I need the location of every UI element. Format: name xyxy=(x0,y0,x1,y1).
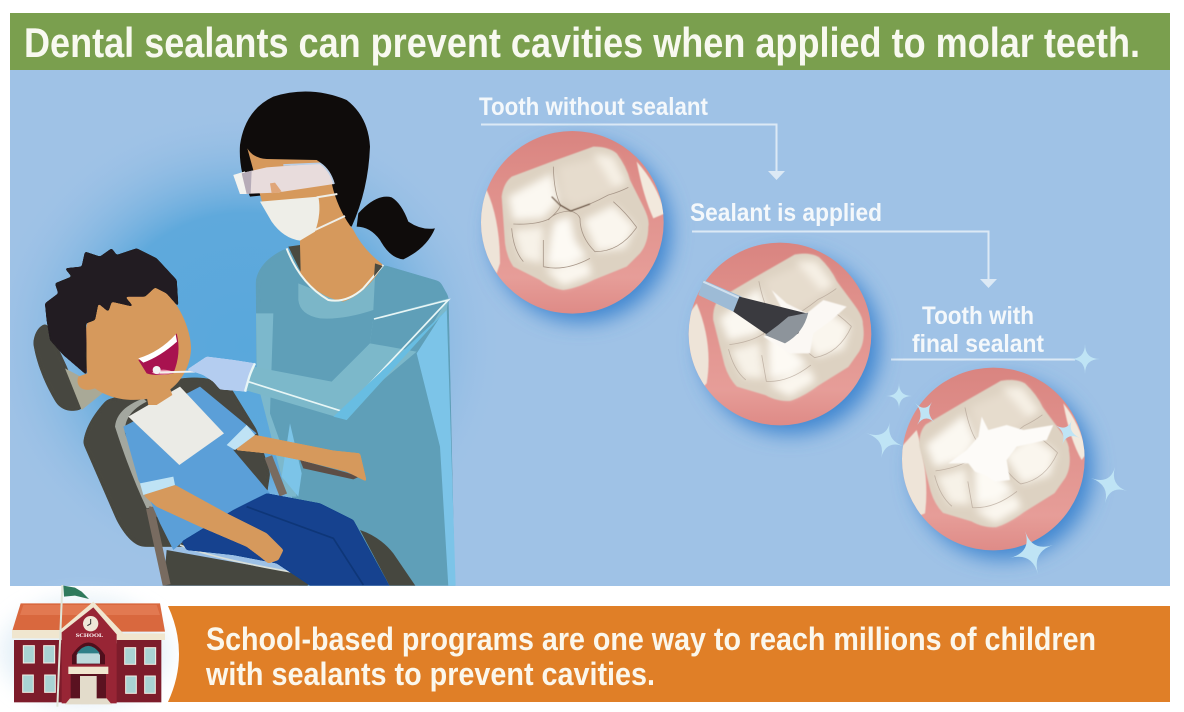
instruction: sealant applied: Sealant is applied xyxy=(690,199,882,227)
gloved hand xyxy=(187,357,255,392)
child head xyxy=(77,285,191,405)
instruction: tooth with final sealant: Tooth with xyxy=(922,302,1034,330)
instruction: tooth without sealant: Tooth without sealant xyxy=(479,93,709,121)
arrow: to sealant applied xyxy=(481,124,785,180)
panel: blue illustration background xyxy=(10,70,1170,586)
goggles xyxy=(233,163,334,194)
icon: school building: SCHOOL xyxy=(76,634,104,639)
dentist hair xyxy=(240,92,370,227)
chair headrest xyxy=(33,323,107,411)
tooth 2: sealant being applied xyxy=(687,242,874,427)
dentist ponytail xyxy=(357,197,435,259)
bib xyxy=(128,387,224,465)
sparkles xyxy=(866,344,1127,574)
orange banner xyxy=(168,606,1170,702)
tooth 1: without sealant xyxy=(480,130,665,315)
icon: school building xyxy=(12,585,165,707)
dental mirror xyxy=(152,366,195,374)
instruction: sealant applied xyxy=(690,199,997,288)
child hair xyxy=(45,248,178,375)
dentist sleeve xyxy=(245,298,448,420)
instruction: tooth with final sealant: final sealant xyxy=(912,330,1045,358)
faint glow around school xyxy=(0,597,170,707)
dentist gown xyxy=(256,248,456,600)
child arms xyxy=(140,425,367,563)
background glow behind figures xyxy=(27,144,464,501)
instruction: tooth with final sealant xyxy=(891,302,1075,360)
header banner xyxy=(10,13,1170,70)
illustration: dentist and child xyxy=(33,92,456,600)
chair back and seat xyxy=(83,378,416,587)
banner text: with sealants to prevent cavities. xyxy=(205,656,655,692)
child pants xyxy=(182,493,392,590)
brush xyxy=(698,280,808,343)
mask xyxy=(260,194,345,241)
instruction: tooth without sealant xyxy=(479,93,785,180)
child shirt xyxy=(123,387,270,550)
child mouth xyxy=(138,333,179,375)
tooth shadows xyxy=(491,142,1093,559)
tooth 3: with final sealant xyxy=(900,367,1087,553)
arrow: to final sealant xyxy=(692,232,997,288)
dentist face and neck xyxy=(247,148,383,302)
banner text: School-based programs are one way to reach millions of children xyxy=(206,621,1096,657)
collar xyxy=(287,248,383,301)
